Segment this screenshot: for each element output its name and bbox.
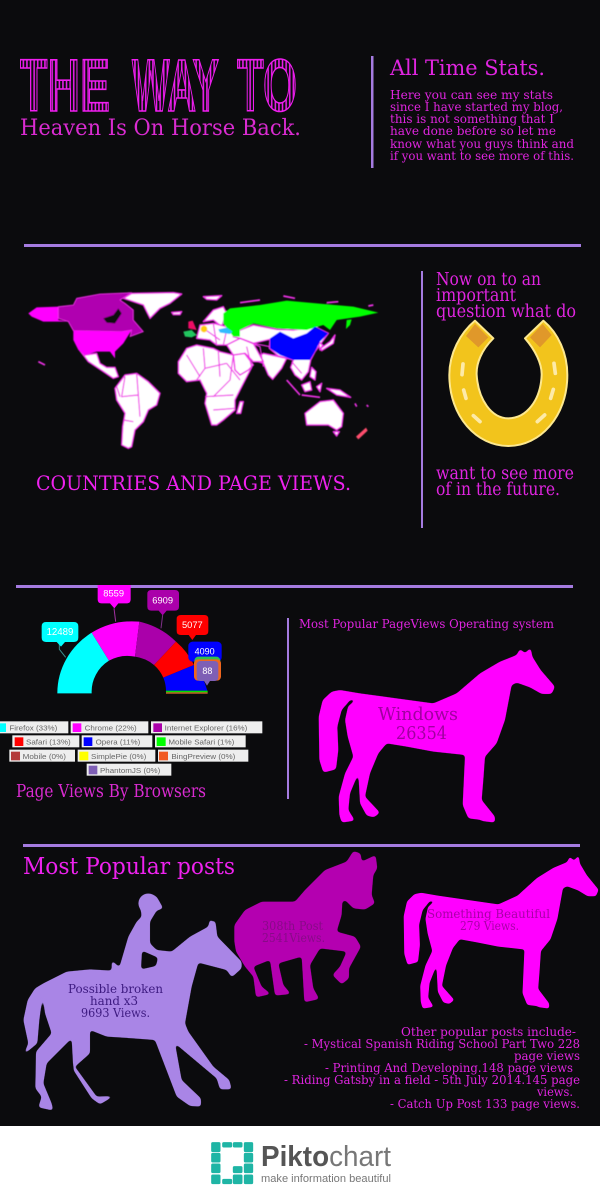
os heading: Most Popular PageViews Operating system [299, 616, 554, 631]
world map [28, 293, 378, 448]
icon: windows horse [319, 647, 555, 823]
callout: firefox [42, 622, 78, 657]
callout: phantomjs: 88 [202, 666, 212, 676]
legend: mobile safari: Mobile Safari (1%) [168, 738, 234, 747]
map: canada [58, 293, 143, 337]
other popular posts list: page views [514, 1048, 580, 1063]
legend: chrome [71, 721, 148, 733]
map: germany [201, 326, 207, 332]
legend: simplepie [78, 750, 155, 762]
slice: firefox [57, 633, 109, 693]
other popular posts list: - Mystical Spanish Riding School Part Two 228 [304, 1036, 580, 1051]
third horse label: Something Beautiful [427, 906, 550, 921]
browser donut chart [42, 585, 222, 694]
legend: chrome: Chrome (22%) [85, 724, 137, 733]
map: white countries [80, 293, 351, 448]
map: new zealand [356, 428, 368, 439]
legend: firefox [0, 721, 68, 733]
question text top [436, 270, 576, 322]
callout: stacked small browsers [194, 657, 221, 681]
icon: horse and rider [23, 893, 242, 1111]
legend: mobile safari [155, 735, 246, 747]
question text top: important [436, 286, 516, 306]
subtitle: Heaven Is On Horse Back. [20, 116, 301, 141]
intro text: this is not something that I [390, 111, 554, 126]
title: the way to: THE [20, 44, 110, 127]
other popular posts list: views. [536, 1084, 573, 1099]
question text top: question what do [436, 302, 576, 322]
legend: bingpreview [158, 750, 248, 762]
pony label: 308th Post [262, 919, 323, 933]
intro text: Here you can see my stats [390, 87, 553, 102]
callout: internet explorer [147, 590, 179, 628]
other popular posts list: - Catch Up Post 133 page views. [390, 1096, 580, 1111]
question text bottom [436, 464, 574, 500]
other popular posts list: Other popular posts include- [401, 1024, 576, 1039]
slice: safari [154, 642, 194, 678]
windows label: Windows [378, 704, 458, 725]
map: ukraine [218, 328, 232, 334]
title: the way to: WAY [132, 44, 219, 127]
map: france [183, 330, 197, 337]
slice: small browsers [166, 691, 208, 694]
callout: phantomjs [197, 661, 218, 686]
map caption: COUNTRIES AND PAGE VIEWS. [36, 471, 351, 495]
question text bottom: of in the future. [436, 480, 560, 500]
callout: opera: 4090 [195, 647, 215, 657]
intro text: know what you guys think and [390, 136, 574, 151]
browser legend [0, 721, 262, 776]
other popular posts list [284, 1024, 580, 1111]
other popular posts list: - Printing And Developing.148 page views [325, 1060, 573, 1075]
legend: bingpreview: BingPreview (0%) [171, 752, 235, 761]
title: the way to: TO [237, 44, 297, 127]
footer band [0, 1126, 600, 1199]
legend: phantomjs [87, 764, 171, 776]
callout: opera [188, 642, 222, 662]
rider horse label: hand x3 [90, 993, 138, 1008]
browsers caption: Page Views By Browsers [16, 782, 206, 802]
map: country borders [38, 296, 373, 422]
slice: opera [163, 665, 207, 691]
icon: third horse [404, 855, 599, 1009]
legend: simplepie: SimplePie (0%) [91, 752, 146, 761]
map: hudson bay [103, 308, 122, 323]
pony label: 2541Views. [262, 931, 325, 945]
third horse label [427, 906, 550, 933]
legend: internet explorer: Internet Explorer (16%) [165, 724, 247, 733]
slice: internet explorer [135, 622, 176, 665]
map: usa [73, 330, 132, 358]
map: alaska [28, 307, 68, 322]
callout: firefox: 12489 [47, 627, 73, 638]
legend: mobile [9, 750, 75, 762]
slice: chrome [92, 621, 139, 661]
other popular posts list: - Riding Gatsby in a field - 5th July 2014.145 page [284, 1072, 580, 1087]
callout: chrome: 8559 [103, 589, 124, 599]
intro heading: All Time Stats. [389, 56, 545, 80]
legend: phantomjs: PhantomJS (0%) [100, 766, 160, 775]
question text top: Now on to an [436, 270, 541, 290]
heading: most popular posts: Most Popular posts [23, 854, 235, 880]
piktochart wordmark: Piktochart [261, 1141, 391, 1173]
piktochart tagline: make information beautiful [261, 1173, 391, 1185]
callout: internet explorer: 6909 [152, 596, 173, 606]
map: uk [188, 321, 197, 330]
callout: safari [177, 615, 208, 640]
icon: pony [234, 851, 377, 1002]
callout: chrome [98, 585, 131, 622]
legend: firefox: Firefox (33%) [9, 724, 57, 733]
icon: piktochart logo [212, 1143, 253, 1184]
intro text [390, 87, 574, 163]
legend: opera [82, 735, 152, 747]
rider horse label: Possible broken [68, 981, 163, 996]
windows label: 26354 [396, 723, 447, 744]
legend: internet explorer [151, 721, 262, 733]
rider horse label [68, 981, 163, 1020]
third horse label: 279 Views. [460, 918, 519, 933]
icon: horseshoe [449, 321, 567, 446]
intro text: have done before so let me [390, 123, 556, 138]
title: the way to [20, 44, 297, 127]
intro text: if you want to see more of this. [390, 148, 574, 163]
map: sakhalin [346, 319, 352, 329]
legend: safari: Safari (13%) [26, 738, 71, 747]
intro text: since I have started my blog, [390, 99, 563, 114]
map: russia [223, 301, 378, 337]
pony label [262, 919, 325, 945]
map: china [270, 327, 328, 360]
question text bottom: want to see more [436, 464, 574, 484]
legend: mobile: Mobile (0%) [23, 752, 66, 761]
callout: safari: 5077 [182, 620, 203, 630]
legend: safari [12, 735, 79, 747]
windows label [378, 704, 458, 744]
legend: opera: Opera (11%) [96, 738, 140, 747]
rider horse label: 9693 Views. [81, 1005, 150, 1020]
